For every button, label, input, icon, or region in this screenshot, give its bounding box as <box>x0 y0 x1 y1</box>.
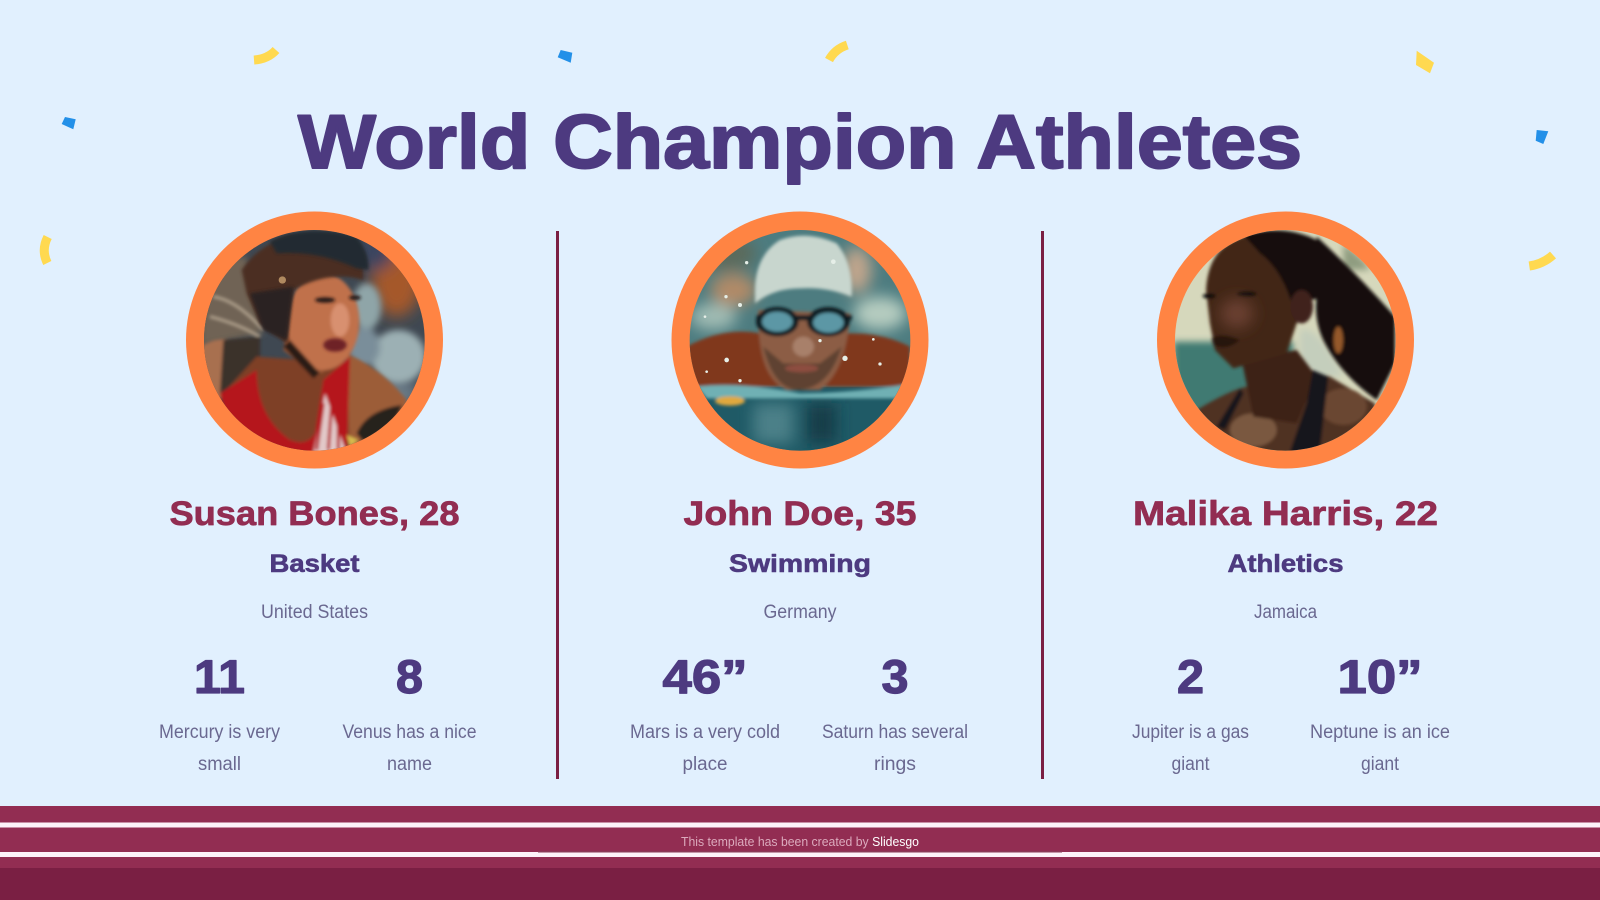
stat: 2: 2 <box>1177 650 1204 703</box>
sport: Basket <box>270 550 360 578</box>
stat: 3: 3 <box>882 650 908 703</box>
stat: 10 <box>1310 650 1450 775</box>
portrait: John Doe <box>672 212 928 468</box>
stat: 10: giant <box>1361 754 1400 775</box>
stat: 46 <box>630 650 780 775</box>
stat: 10: Neptune is an ice <box>1310 722 1450 743</box>
stat: 8 <box>342 650 476 775</box>
stat: 3: Saturn has several <box>822 722 968 743</box>
stat: 11: 11 <box>194 650 245 703</box>
footer credit: This template has been created by Slidesgo <box>681 835 919 849</box>
portrait: Susan Bones <box>186 212 443 468</box>
stat: 8: Venus has a nice <box>342 722 476 743</box>
country: Jamaica <box>1254 602 1317 623</box>
name: Malika Harris, 22 <box>1133 495 1438 533</box>
stat: 46: place <box>682 754 728 775</box>
panel: John Doe <box>630 212 968 775</box>
stat: 11 <box>159 650 280 775</box>
sport: Athletics <box>1228 550 1344 578</box>
panel: Susan Bones <box>159 212 476 775</box>
stat: 3: rings <box>874 754 916 775</box>
confetti decorations <box>44 45 1553 266</box>
sport: Swimming <box>729 550 871 578</box>
stat: 3 <box>822 650 968 775</box>
stat: 2: Jupiter is a gas <box>1132 722 1249 743</box>
stat: 8: 8 <box>396 650 423 703</box>
stat: 2: giant <box>1172 754 1210 775</box>
footer track stripes <box>0 806 1600 900</box>
stat: 11: Mercury is very <box>159 722 280 743</box>
country: Germany <box>764 602 837 623</box>
stat: 8: name <box>387 754 432 775</box>
divider left <box>556 231 559 779</box>
name: Susan Bones, 28 <box>170 495 460 533</box>
title: World Champion Athletes <box>298 100 1302 185</box>
panel: Malika Harris <box>1132 212 1450 775</box>
stat: 10: 10” <box>1338 650 1422 703</box>
stat: 46: 46” <box>662 650 748 703</box>
divider right <box>1041 231 1044 779</box>
portrait: Malika Harris <box>1157 212 1414 468</box>
country: United States <box>261 602 368 623</box>
stat: 11: small <box>198 754 241 775</box>
name: John Doe, 35 <box>684 495 916 533</box>
stat: 2 <box>1132 650 1249 775</box>
stat: 46: Mars is a very cold <box>630 722 780 743</box>
